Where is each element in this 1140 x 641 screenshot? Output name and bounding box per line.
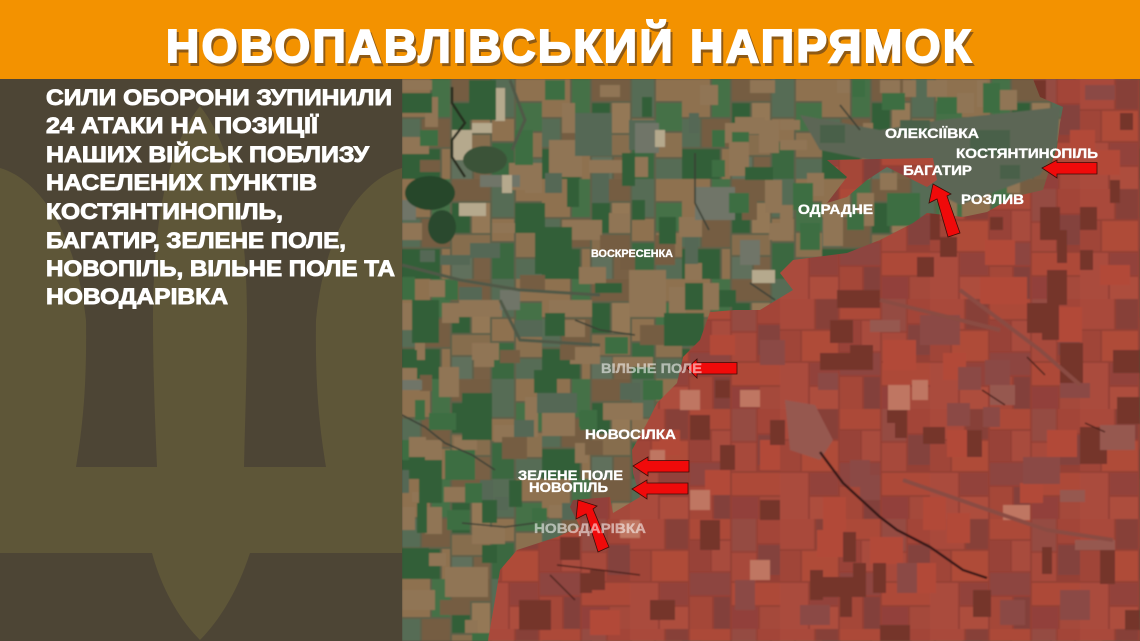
label: Вільне поле: ВІЛЬНЕ ПОЛЕ — [601, 360, 702, 376]
arrow: Новодарівка — [576, 500, 609, 552]
text block: attack summary: НОВОПІЛЬ, ВІЛЬНЕ ПОЛЕ ТА — [46, 256, 395, 281]
header band — [0, 0, 1140, 79]
label: Новодарівка: НОВОДАРІВКА — [534, 520, 646, 536]
arrow: Багатир — [929, 184, 960, 237]
label: Розлив: РОЗЛИВ — [961, 192, 1024, 207]
text block: attack summary: 24 АТАКИ НА ПОЗИЦІЇ — [46, 113, 319, 138]
text block: attack summary — [46, 85, 395, 309]
icon: trident emblem — [0, 106, 402, 640]
panel: left background — [0, 78, 402, 641]
arrow: Новопіль — [632, 480, 688, 499]
label: Одрадне: ОДРАДНЕ — [798, 202, 873, 217]
title: НОВОПАВЛІВСЬКИЙ НАПРЯМОК — [166, 20, 972, 72]
occupied territory overlay — [480, 79, 1140, 641]
arrow: Вільне поле — [687, 359, 737, 378]
text block: attack summary: НАСЕЛЕНИХ ПУНКТІВ — [46, 170, 317, 195]
label: Зелене поле: ЗЕЛЕНЕ ПОЛЕ — [518, 467, 623, 483]
label: Костянтинопіль: КОСТЯНТИНОПІЛЬ — [956, 146, 1098, 161]
label: Новосілка: НОВОСІЛКА — [585, 427, 676, 442]
title: НОВОПАВЛІВСЬКИЙ НАПРЯМОК — [168, 23, 974, 75]
label: Воскресенка: ВОСКРЕСЕНКА — [591, 248, 673, 260]
text block: attack summary: БАГАТИР, ЗЕЛЕНЕ ПОЛЕ, — [46, 228, 346, 253]
label: Новопіль: НОВОПІЛЬ — [529, 479, 608, 495]
text block: attack summary: НАШИХ ВІЙСЬК ПОБЛИЗУ — [46, 142, 369, 167]
label: Багатир: БАГАТИР — [903, 163, 972, 178]
text block: attack summary: КОСТЯНТИНОПІЛЬ, — [46, 199, 283, 224]
arrow: Костянтинопіль — [1042, 160, 1097, 178]
arrow: Зелене поле — [633, 457, 689, 476]
label: Олексіївка: ОЛЕКСІЇВКА — [885, 126, 979, 141]
text block: attack summary: НОВОДАРІВКА — [46, 284, 228, 309]
text block: attack summary: СИЛИ ОБОРОНИ ЗУПИНИЛИ — [46, 85, 392, 110]
